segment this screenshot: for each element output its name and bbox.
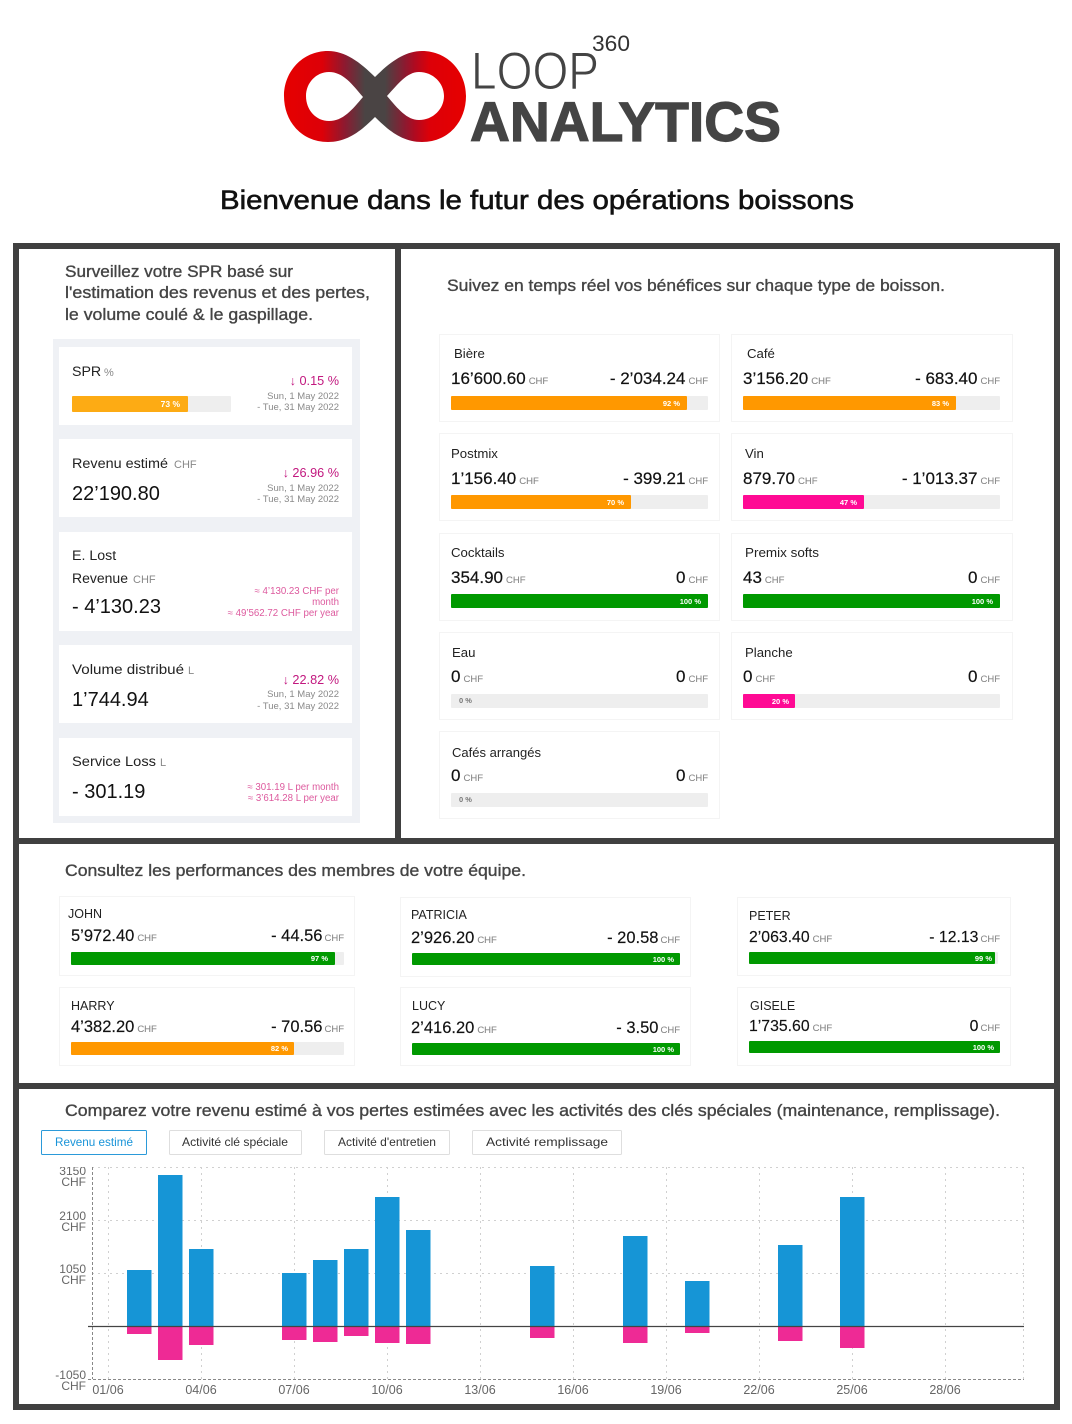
card: Café xyxy=(732,334,1012,422)
KPI card: service loss: Service Loss xyxy=(72,754,156,770)
KPI card: estimated revenue: CHF xyxy=(174,459,197,471)
logo: Loop 360 Analytics xyxy=(284,31,781,153)
card: Cocktails: 0 CHF xyxy=(676,568,708,587)
KPI card: estimated revenue: 22’190.80 xyxy=(72,483,160,505)
panel: profit per drink type xyxy=(440,277,1012,818)
KPI card: dispensed volume: ↓ 22.82 % xyxy=(283,673,339,687)
y axis labels: 3150 xyxy=(59,1164,86,1178)
card: John: - 44.56CHF xyxy=(271,927,344,945)
card: Vin: 47 % xyxy=(840,498,857,507)
panel: SPR monitoring xyxy=(53,263,370,823)
progress bar: 73 %: 73 % xyxy=(161,399,180,409)
KPI card: lost revenue: - 4’130.23 xyxy=(72,596,161,618)
button: Activité remplissage: Activité remplissage xyxy=(486,1135,608,1149)
KPI card: lost revenue xyxy=(59,532,352,631)
card: Lucy: 2’416.20 CHF xyxy=(411,1019,497,1037)
card: Bière: 92 % xyxy=(663,399,680,408)
bar chart: revenue and losses per day xyxy=(50,1156,1024,1397)
card: Patricia: 2’926.20 CHF xyxy=(411,929,497,947)
card: Café: 83 % xyxy=(932,399,949,408)
KPI card: service loss: L xyxy=(160,757,166,769)
card: Bière xyxy=(440,334,720,422)
card: Bière: - 2’034.24 CHF xyxy=(610,369,708,388)
x axis labels xyxy=(92,1383,961,1397)
card: Cocktails xyxy=(440,534,720,620)
KPI card: estimated revenue xyxy=(59,439,352,517)
card: Premix softs: 43 CHF xyxy=(743,568,785,587)
y axis labels: CHF xyxy=(61,1220,86,1234)
x axis labels: 10/06 xyxy=(371,1383,403,1397)
KPI card: dispensed volume: - Tue, 31 May 2022 xyxy=(257,701,339,712)
card: Vin: Vin xyxy=(745,446,764,461)
KPI card: dispensed volume: Sun, 1 May 2022 xyxy=(267,689,339,700)
KPI card: dispensed volume xyxy=(59,645,352,723)
x axis labels: 28/06 xyxy=(929,1383,961,1397)
card: Bière: Bière xyxy=(454,346,485,361)
card: Cafés arrangés: 0 CHF xyxy=(676,766,708,785)
card: Cocktails: Cocktails xyxy=(451,545,505,560)
card: Postmix: 70 % xyxy=(607,498,624,507)
KPI card: service loss: ≈ 301.19 L per month xyxy=(247,782,339,793)
panel: revenue versus losses xyxy=(42,1102,1024,1397)
revenue bars xyxy=(127,1175,864,1327)
filter buttons xyxy=(42,1130,622,1154)
card: Peter xyxy=(738,898,1010,976)
KPI card: estimated revenue: Revenu estimé xyxy=(72,456,168,472)
card: Peter: - 12.13CHF xyxy=(929,929,1000,946)
heading: SPR monitoring: l'estimation des revenus et des pertes, xyxy=(65,284,370,302)
x axis labels: 07/06 xyxy=(278,1383,310,1397)
card: Harry: 82 % xyxy=(271,1044,288,1053)
KPI card: lost revenue: Revenue xyxy=(72,571,128,587)
KPI card: service loss: - 301.19 xyxy=(72,781,145,803)
progress bar: 73 % xyxy=(72,396,231,412)
card: Patricia xyxy=(400,898,690,976)
card: Planche: 20 % xyxy=(772,697,789,706)
logo superscript: 360: 360 xyxy=(592,31,630,56)
y axis labels: 1050 xyxy=(59,1262,86,1276)
KPI column background xyxy=(53,339,360,823)
y axis labels: CHF xyxy=(61,1379,86,1393)
button: Activité remplissage xyxy=(472,1130,622,1154)
KPI card: lost revenue: CHF xyxy=(133,574,156,586)
card: Eau: Eau xyxy=(452,645,475,660)
card: Harry: HARRY xyxy=(71,999,115,1013)
card: Eau xyxy=(440,632,720,720)
card: Peter: 2’063.40 CHF xyxy=(749,929,832,946)
card: Planche: 0 CHF xyxy=(743,667,775,686)
card: Café: 3’156.20 CHF xyxy=(743,369,831,388)
card: Vin: - 1’013.37 CHF xyxy=(902,469,1000,488)
card: Harry: 4’382.20 CHF xyxy=(71,1018,157,1036)
card: Postmix xyxy=(440,434,720,520)
card: Planche: Planche xyxy=(745,645,793,660)
panel: team performance xyxy=(60,862,1010,1066)
card: Vin: 879.70 CHF xyxy=(743,469,818,488)
KPI card: lost revenue: ≈ 4’130.23 CHF per xyxy=(255,586,340,597)
KPI card: service loss: ≈ 3’614.28 L per year xyxy=(248,793,340,804)
card: Premix softs: 100 % xyxy=(972,597,993,606)
card: Premix softs: 0 CHF xyxy=(968,568,1000,587)
card: Cafés arrangés: 0 % xyxy=(459,795,472,804)
card: Lucy: LUCY xyxy=(412,999,446,1013)
heading: profit per drink type: Suivez en temps réel vos bénéfices sur chaque type de boisson. xyxy=(447,277,945,295)
y axis labels: CHF xyxy=(61,1273,86,1287)
button: Revenu estimé xyxy=(42,1130,146,1154)
x axis labels: 16/06 xyxy=(557,1383,589,1397)
card: Patricia: 100 % xyxy=(653,955,674,964)
card: Gisele: 1’735.60 CHF xyxy=(749,1018,832,1035)
card: Harry: - 70.56CHF xyxy=(271,1018,344,1036)
card: Postmix: Postmix xyxy=(451,446,498,461)
x axis labels: 25/06 xyxy=(836,1383,868,1397)
KPI card: SPR: Sun, 1 May 2022 xyxy=(267,391,339,402)
card: Eau: 0 CHF xyxy=(451,667,483,686)
x axis labels: 19/06 xyxy=(650,1383,682,1397)
card: Vin xyxy=(732,434,1012,520)
button: Activité d'entretien xyxy=(324,1130,450,1154)
y axis labels: 2100 xyxy=(59,1209,86,1223)
card: John xyxy=(60,896,354,976)
card: Gisele: 100 % xyxy=(973,1043,994,1052)
card: Café: Café xyxy=(747,346,775,361)
card: Gisele: 0CHF xyxy=(970,1018,1000,1035)
logo word: ANALYTICS: ANALYTICS xyxy=(470,90,781,153)
heading: SPR monitoring: Surveillez votre SPR basé sur xyxy=(65,263,294,281)
card: Café: - 683.40 CHF xyxy=(915,369,1000,388)
KPI card: SPR: - Tue, 31 May 2022 xyxy=(257,402,339,413)
KPI card: dispensed volume: 1’744.94 xyxy=(72,689,149,711)
card: Lucy xyxy=(400,988,690,1066)
card: Cafés arrangés: Cafés arrangés xyxy=(452,745,541,760)
x axis labels: 22/06 xyxy=(743,1383,775,1397)
card: Patricia: - 20.58CHF xyxy=(607,929,680,947)
card: Premix softs: Premix softs xyxy=(745,545,819,560)
card: Cafés arrangés: 0 CHF xyxy=(451,766,483,785)
y axis labels: CHF xyxy=(61,1175,86,1189)
heading: revenue versus losses: Comparez votre revenu estimé à vos pertes estimées avec les activités des clés spéciales (maintenance, remplissage). xyxy=(65,1102,1000,1120)
card: Cocktails: 354.90 CHF xyxy=(451,568,526,587)
x axis labels: 01/06 xyxy=(92,1383,124,1397)
KPI card: estimated revenue: Sun, 1 May 2022 xyxy=(267,483,339,494)
heading: SPR monitoring: le volume coulé & le gaspillage. xyxy=(65,306,313,324)
card: Cocktails: 100 % xyxy=(680,597,701,606)
card: Lucy: 100 % xyxy=(653,1045,674,1054)
card: John: JOHN xyxy=(68,907,102,921)
icon: infinity loop xyxy=(284,51,466,142)
card: Peter: 99 % xyxy=(975,954,992,963)
card: John: 97 % xyxy=(311,954,328,963)
card: Planche: 0 CHF xyxy=(968,667,1000,686)
button: Activité clé spéciale: Activité clé spéciale xyxy=(182,1135,288,1149)
card: Harry xyxy=(60,988,354,1066)
KPI card: SPR: ↓ 0.15 % xyxy=(290,374,339,388)
KPI card: estimated revenue: ↓ 26.96 % xyxy=(283,466,339,480)
button: Activité d'entretien: Activité d'entretien xyxy=(338,1135,436,1149)
y axis labels xyxy=(50,1156,90,1393)
KPI card: SPR: % xyxy=(104,367,114,379)
button: Activité clé spéciale xyxy=(170,1130,302,1154)
card: Postmix: 1’156.40 CHF xyxy=(451,469,539,488)
card: Gisele: GISELE xyxy=(750,999,795,1013)
card: Peter: PETER xyxy=(749,909,791,923)
KPI card: SPR: SPR xyxy=(72,364,101,380)
card: Planche xyxy=(732,632,1012,720)
KPI card: dispensed volume: Volume distribué xyxy=(72,662,184,678)
card: Cafés arrangés xyxy=(440,732,720,818)
heading: team performance: Consultez les performances des membres de votre équipe. xyxy=(65,862,526,880)
card: Patricia: PATRICIA xyxy=(411,908,467,922)
card: Premix softs xyxy=(732,534,1012,620)
KPI card: lost revenue: E. Lost xyxy=(72,548,116,564)
card: Eau: 0 CHF xyxy=(676,667,708,686)
card: John: 5’972.40 CHF xyxy=(71,927,157,945)
KPI card: estimated revenue: - Tue, 31 May 2022 xyxy=(257,494,339,505)
KPI card: SPR xyxy=(59,347,352,425)
KPI card: service loss xyxy=(59,738,352,816)
card: Lucy: - 3.50CHF xyxy=(616,1019,680,1037)
loss bars xyxy=(127,1327,864,1360)
logo word: LOOP: LOOP xyxy=(471,42,599,101)
KPI card: dispensed volume: L xyxy=(188,665,194,677)
card: Postmix: - 399.21 CHF xyxy=(623,469,708,488)
card: Gisele xyxy=(738,988,1010,1066)
y axis labels: -1050 xyxy=(55,1368,86,1382)
button: Revenu estimé: Revenu estimé xyxy=(55,1135,133,1149)
x axis labels: 04/06 xyxy=(185,1383,217,1397)
KPI card: lost revenue: ≈ 49’562.72 CHF per year xyxy=(228,608,340,619)
x axis labels: 13/06 xyxy=(464,1383,496,1397)
card: Bière: 16’600.60 CHF xyxy=(451,369,548,388)
KPI card: lost revenue: month xyxy=(312,597,339,608)
card: Eau: 0 % xyxy=(459,696,472,705)
title: Bienvenue dans le futur des opérations boissons xyxy=(220,185,854,215)
heading: SPR monitoring xyxy=(65,263,370,324)
